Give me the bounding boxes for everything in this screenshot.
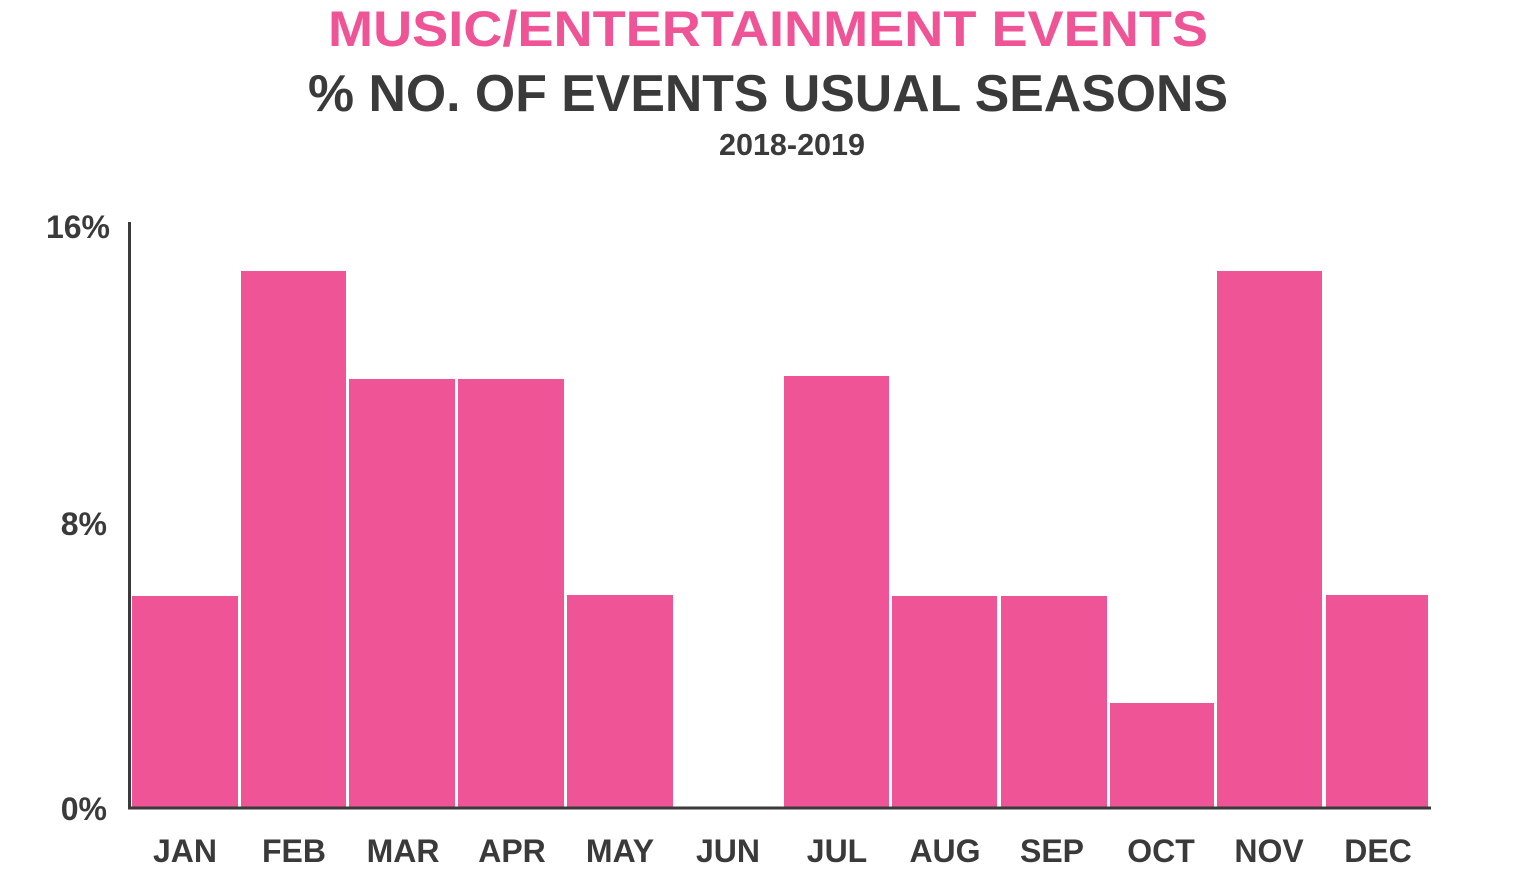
month labels xyxy=(153,833,1412,869)
y-axis labels: 8% xyxy=(61,506,107,542)
month labels: DEC xyxy=(1344,833,1412,869)
title: % NO. OF EVENTS USUAL SEASONS xyxy=(308,65,1228,123)
title: MUSIC/ENTERTAINMENT EVENTS xyxy=(328,1,1208,57)
month labels: JUL xyxy=(807,833,867,869)
month labels: AUG xyxy=(909,833,981,869)
month labels: APR xyxy=(478,833,546,869)
y-axis labels: 0% xyxy=(61,791,107,827)
month labels: FEB xyxy=(262,833,326,869)
month labels: MAR xyxy=(367,833,439,869)
month labels: MAY xyxy=(586,833,654,869)
month labels: OCT xyxy=(1127,833,1195,869)
title: 2018-2019 xyxy=(719,127,865,162)
month labels: JUN xyxy=(696,833,760,869)
axes xyxy=(128,222,1431,809)
month labels: JAN xyxy=(153,833,217,869)
bar chart xyxy=(132,271,1428,808)
y-axis labels xyxy=(46,209,110,827)
title xyxy=(308,1,1228,162)
month labels: SEP xyxy=(1020,833,1084,869)
month labels: NOV xyxy=(1234,833,1304,869)
y-axis labels: 16% xyxy=(46,209,110,245)
